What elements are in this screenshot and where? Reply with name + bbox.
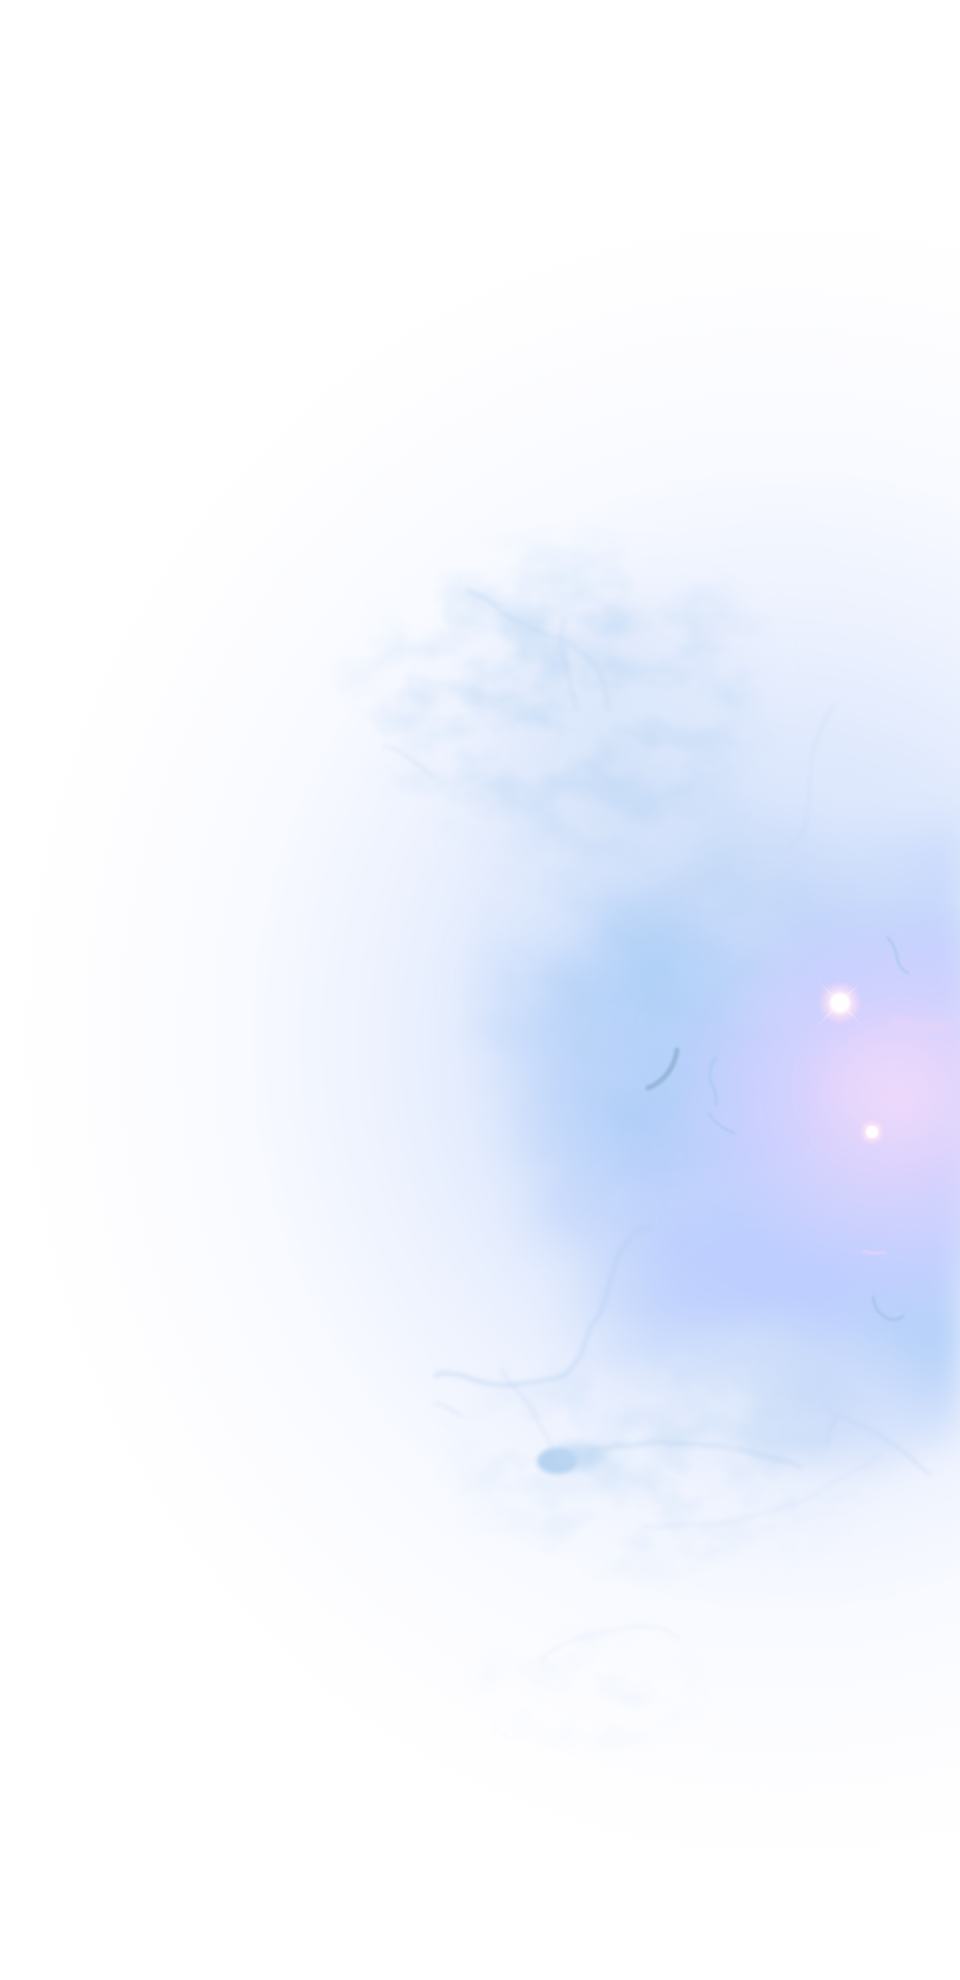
star: large sparkle — [815, 978, 865, 1028]
smoke: procedural texture — [320, 520, 900, 1760]
wisps: small floating streaks — [648, 937, 908, 1320]
glow: pink nebula centre — [675, 900, 960, 1300]
star: small sparkle — [858, 1118, 886, 1146]
smoke: lower tendrils — [432, 1228, 932, 1660]
smoke: upper plume tendrils — [385, 590, 835, 845]
cloud: blue nebula core — [410, 540, 960, 1500]
